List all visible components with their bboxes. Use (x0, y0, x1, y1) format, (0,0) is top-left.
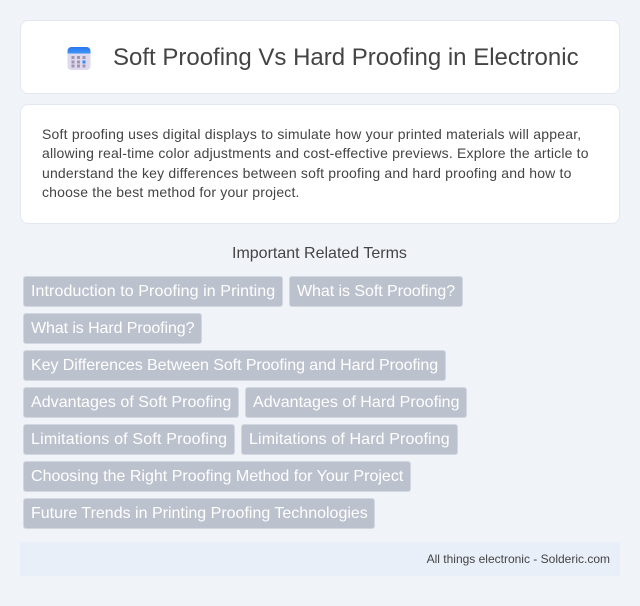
tag: Advantages of Soft Proofing (31, 394, 231, 411)
tag: What is Soft Proofing? (297, 283, 455, 300)
tag (245, 387, 467, 418)
heading: important related terms: Important Related Terms (232, 245, 407, 262)
tag: Advantages of Hard Proofing (253, 394, 460, 411)
footer credit: All things electronic - Solderic.com (427, 552, 610, 566)
text block: description: Soft proofing uses digital displays to simulate how your printed materials will appear, (42, 126, 581, 142)
tag: Limitations of Hard Proofing (249, 431, 450, 448)
tag: What is Hard Proofing? (31, 320, 194, 337)
tag (23, 387, 239, 418)
tag: Key Differences Between Soft Proofing and Hard Proofing (31, 357, 438, 374)
tag (23, 350, 446, 381)
icon: calendar (68, 47, 90, 70)
tag (23, 313, 202, 344)
text block: description: allowing real-time color adjustments and cost-effective previews. Explore the article to (42, 145, 589, 161)
tag (241, 424, 458, 455)
panel: header (20, 20, 620, 94)
footer (20, 542, 620, 576)
tag (23, 498, 375, 529)
tag: Choosing the Right Proofing Method for Your Project (31, 468, 403, 485)
panel: description (20, 104, 620, 224)
tag (23, 276, 283, 307)
title: Soft Proofing Vs Hard Proofing in Electronic (113, 44, 579, 71)
tag: Future Trends in Printing Proofing Technologies (31, 505, 368, 522)
panel: related terms tags (23, 276, 467, 529)
tag (23, 461, 411, 492)
text block: description: choose the best method for your project. (42, 184, 300, 200)
tag (23, 424, 235, 455)
text block: description (42, 126, 589, 200)
tag: Limitations of Soft Proofing (31, 431, 227, 448)
tag: Introduction to Proofing in Printing (31, 283, 275, 300)
text block: description: understand the key differences between soft proofing and hard proofing and how to (42, 165, 572, 181)
tag (289, 276, 463, 307)
